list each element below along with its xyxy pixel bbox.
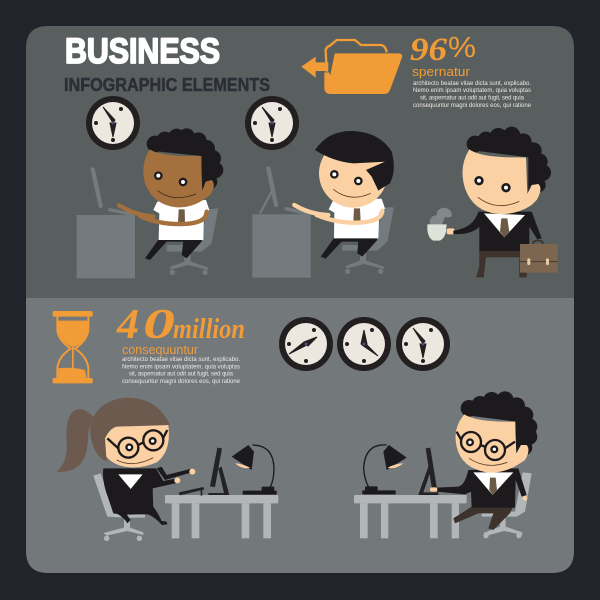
desk 2 <box>252 214 311 278</box>
head 2 <box>319 139 388 208</box>
icon: clock 4 <box>337 317 391 371</box>
shirt 1 <box>153 200 209 240</box>
jacket <box>103 468 178 515</box>
arms 2 <box>294 205 382 223</box>
glasses <box>107 430 167 458</box>
text block: top paragraph: sit, aspernatur aut odit aut fugit, sed quia <box>420 96 525 102</box>
head <box>456 414 528 473</box>
panel: bottom section <box>26 298 574 573</box>
icon: hourglass <box>53 311 93 383</box>
arms 1 <box>119 205 207 224</box>
collar <box>484 213 525 237</box>
stat: 40 million: million <box>173 313 245 345</box>
stat: 40 million: 4 <box>116 302 139 348</box>
eyes and smile <box>117 437 157 464</box>
collar <box>473 472 513 495</box>
stat: 40 million <box>116 302 245 348</box>
text block: bottom paragraph: Nemo enim ipsam voluptatem, quia voluptas <box>122 364 240 370</box>
lamp <box>232 445 277 495</box>
head 1 <box>143 149 214 207</box>
icon: clock 3 <box>279 317 333 371</box>
cup <box>427 224 447 241</box>
legs 2 <box>321 237 377 259</box>
desk <box>165 495 278 538</box>
stat: 40 million: 0 <box>143 302 175 348</box>
steam <box>430 208 452 225</box>
monitor <box>179 448 229 496</box>
chair <box>93 473 145 541</box>
hair back <box>461 391 537 455</box>
legs <box>453 507 513 530</box>
icon: clock 2 <box>245 96 299 150</box>
hands <box>174 469 195 483</box>
chair 1 <box>167 208 218 275</box>
panel: top section <box>26 26 574 298</box>
eyes and smile <box>466 438 507 465</box>
shirt 2 <box>329 199 385 238</box>
head 3 <box>462 149 540 214</box>
briefcase <box>520 240 558 273</box>
text block: bottom paragraph <box>122 357 241 385</box>
figure: man with coffee and briefcase <box>427 127 558 277</box>
stat: 96% <box>410 32 476 68</box>
desk <box>354 495 467 538</box>
lamp <box>362 445 407 494</box>
chair <box>482 472 532 538</box>
stat: 96%: 96 <box>410 32 448 68</box>
tie <box>489 478 497 495</box>
monitor <box>418 448 438 495</box>
upper arm <box>157 467 192 480</box>
figure: man with straight hair at desk <box>252 131 394 278</box>
text block: bottom paragraph: consequuntur magni dolores eos, qui ratione <box>122 379 241 385</box>
hand <box>447 228 455 234</box>
hair 2 <box>315 131 394 191</box>
icon: clock 5 <box>396 317 450 371</box>
tie 1 <box>178 209 185 223</box>
text block: bottom paragraph: sit, aspernatur aut odit aut fugit, sed quia <box>129 372 234 378</box>
jacket <box>437 468 527 508</box>
stat: 96%: % <box>448 32 476 64</box>
ponytail <box>57 409 93 472</box>
head <box>102 425 169 467</box>
subtitle: INFOGRAPHIC ELEMENTS <box>64 75 270 95</box>
text block: top paragraph <box>413 81 532 109</box>
hair <box>90 398 170 462</box>
text block: top paragraph: consequuntur magni dolores eos, qui ratione <box>413 103 532 109</box>
text block: bottom paragraph: architecto beatae vitae dicta sunt, explicabo. <box>122 357 240 363</box>
jacket <box>453 212 542 251</box>
tie 2 <box>353 208 361 222</box>
figure: woman at desk <box>57 398 278 541</box>
face 3 <box>474 176 519 206</box>
legs 1 <box>145 237 202 260</box>
figure: dark-skinned man at desk <box>77 128 223 278</box>
figure: man with glasses at desk <box>354 391 537 538</box>
text block: top paragraph: architecto beatae vitae dicta sunt, explicabo. <box>413 81 531 87</box>
title: BUSINESS <box>65 32 220 71</box>
hair 3 back <box>467 127 551 195</box>
monitor 2 <box>260 168 308 214</box>
pants <box>476 250 527 277</box>
icon: folder with arrow <box>301 40 402 94</box>
hands <box>430 487 527 501</box>
icon: clock 1 <box>86 96 140 150</box>
hair 1 back <box>147 128 223 192</box>
legs <box>117 505 167 525</box>
face 1 <box>154 171 196 198</box>
text block: top paragraph: Nemo enim ipsam voluptatem, quia voluptas <box>413 88 531 94</box>
chair 2 <box>342 207 394 274</box>
label: consequuntur: consequuntur <box>122 342 199 357</box>
face 2 <box>330 170 371 197</box>
glasses <box>457 432 515 460</box>
desk 1 <box>77 215 135 278</box>
label: spernatur: spernatur <box>412 64 471 79</box>
tie <box>500 218 509 237</box>
monitor 1 <box>93 169 133 215</box>
collar <box>118 474 143 489</box>
